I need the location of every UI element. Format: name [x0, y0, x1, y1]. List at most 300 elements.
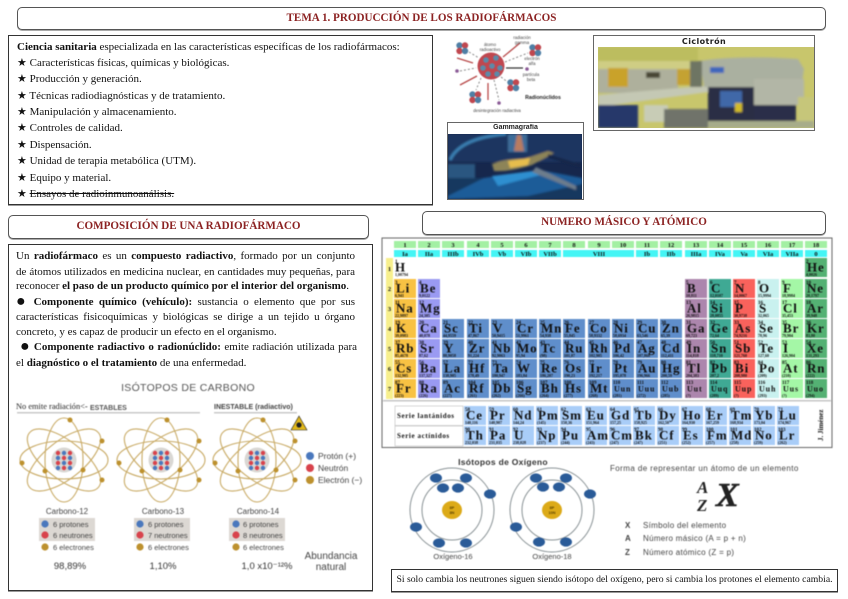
element cells: (223)	[395, 393, 404, 398]
lanthanide and actinide series: U	[514, 428, 524, 442]
element cells: 38	[419, 341, 424, 346]
chart: isótopos de carbono: natural	[316, 562, 346, 573]
subgroup labels: Ia	[402, 251, 409, 258]
image: radionuclide diagram: gamma	[515, 40, 530, 45]
list item: ★ Técnicas radiodiagnósticas y de tratamiento.	[17, 90, 225, 102]
lanthanide and actinide series: (247)	[610, 440, 619, 445]
element cells: I	[783, 340, 789, 356]
element cells: 204,383	[686, 373, 699, 378]
group numbers: 7	[548, 242, 552, 249]
lanthanide and actinide series: Yb	[755, 408, 773, 422]
diagram: notación atómica: Forma de representar un átomo de un elemento	[610, 464, 799, 473]
element cells: 121,760	[734, 353, 747, 358]
element cells: 40	[468, 341, 474, 346]
element cells: 118	[806, 381, 814, 386]
element cells: 18,9984	[782, 293, 795, 298]
list item: ★ Dispensación.	[17, 138, 92, 150]
element cells: 80	[661, 361, 666, 366]
element cells: 186,207	[540, 373, 553, 378]
period numbers	[386, 258, 393, 399]
subgroup labels: Vb	[498, 251, 507, 258]
element cells: 108	[564, 381, 572, 386]
lanthanide and actinide series: 62	[561, 408, 566, 413]
element cells: 9,0122	[419, 293, 430, 298]
lanthanide and actinide series: Eu	[587, 408, 605, 422]
lanthanide and actinide series: 65	[634, 408, 640, 413]
callout: nota final: Si solo cambia los neutrones siguen siendo isótopo del oxígeno, pero si cambia los protones el elemento cambia.	[396, 574, 833, 585]
diagram: notación atómica: Símbolo del elemento	[643, 521, 727, 530]
list item: ★ Equipo y material.	[17, 172, 111, 184]
element cells: 87,62	[419, 353, 428, 358]
image: radionuclide diagram: alfa	[529, 61, 536, 66]
element cells: 19	[395, 321, 400, 326]
period numbers: 6	[388, 366, 392, 373]
element cells: 50,9415	[492, 333, 505, 338]
element cells: 22	[468, 321, 474, 326]
chart: isótopos de carbono: Carbono-13	[142, 507, 185, 516]
element cells: 83	[734, 361, 740, 366]
element cells: C	[711, 280, 721, 296]
lanthanide and actinide series: Cm	[611, 428, 633, 442]
element cells: 78,96	[758, 333, 767, 338]
element cells: Fe	[565, 320, 581, 336]
element cells: (277)	[564, 393, 573, 398]
element cells: 126,904	[782, 353, 795, 358]
element cells: 39,0983	[395, 333, 408, 338]
element cells: Mt	[590, 380, 608, 396]
element cells: Mn	[541, 320, 562, 336]
lanthanide and actinide series: Tb	[635, 408, 653, 422]
element cells: Nb	[493, 340, 511, 356]
lanthanide and actinide series: Md	[731, 428, 752, 442]
lanthanide and actinide series: 99	[682, 428, 688, 433]
lanthanide and actinide series: (244)	[561, 440, 570, 445]
period numbers: 2	[388, 286, 391, 293]
diagram: notación atómica: Z	[625, 548, 630, 557]
image: radionuclide diagram: electrón	[524, 56, 540, 61]
diagram: notación atómica: A	[625, 534, 631, 543]
element cells: 65,39	[661, 333, 670, 338]
element cells: 54,938	[540, 333, 551, 338]
element cells: 45	[589, 341, 594, 346]
element cells: 117	[782, 381, 790, 386]
lanthanide and actinide series: 100	[706, 428, 714, 433]
element cells: 37	[395, 341, 400, 346]
element cells: Rf	[469, 380, 485, 396]
element cells: Uut	[687, 384, 703, 394]
lanthanide and actinide series: (258)	[730, 440, 739, 445]
lanthanide and actinide series: 151,964	[586, 420, 599, 425]
lanthanide and actinide series: Lu	[779, 408, 797, 422]
diagram: isótopos de oxígeno: 10N	[549, 511, 556, 515]
element cells: 39	[443, 341, 448, 346]
element cells: Pd	[614, 340, 631, 356]
element cells: 54	[806, 341, 812, 346]
element cells: 180,947	[492, 373, 505, 378]
element cells: 114	[710, 381, 718, 386]
line: de átomos utilizados en medicina nuclear, en cantidades muy pequeñas, para	[16, 266, 355, 278]
element cells: Hf	[469, 360, 485, 376]
chart: isótopos de carbono: Electrón (−)	[318, 475, 362, 485]
element cells: 85	[782, 361, 788, 366]
element cells: 27	[589, 321, 594, 326]
element cells: 44,9559	[443, 333, 456, 338]
element cells: Uuu	[638, 384, 655, 394]
chart: isótopos de carbono: No emite radiación<-	[16, 402, 88, 411]
chart: isótopos de carbono: Neutrón	[318, 463, 349, 473]
list item: ★ Manipulación y almacenamiento.	[17, 106, 177, 118]
lanthanide and actinide series: Ho	[683, 408, 701, 422]
element cells: 63,546	[637, 333, 648, 338]
element cells: 10,811	[686, 293, 697, 298]
element cells: (210)	[782, 373, 791, 378]
element cells: 6	[710, 281, 713, 286]
chart: isótopos de carbono: INESTABLE (radiactivo)	[214, 404, 293, 411]
lanthanide and actinide series: Sm	[562, 408, 582, 422]
element cells: W	[517, 360, 531, 376]
lanthanide and actinide series: 98	[658, 428, 664, 433]
element cells: 17	[782, 301, 788, 306]
lanthanide and actinide series: Ce	[466, 408, 483, 422]
element cells: La	[444, 360, 461, 376]
group numbers	[394, 241, 827, 249]
element cells: Ar	[807, 300, 824, 316]
line: el diagnóstico o el tratamiento de una enfermedad.	[16, 357, 246, 369]
line: reconocer el paso de un producto químico por el interior del organismo.	[16, 280, 349, 292]
element cells: Te	[759, 340, 774, 356]
group numbers: 16	[765, 242, 772, 249]
element cells: (222)	[806, 373, 815, 378]
element cells: 55,845	[564, 333, 575, 338]
lanthanide and actinide series: Pu	[562, 428, 579, 442]
lanthanide and actinide series: 70	[754, 408, 760, 413]
lanthanide and actinide series: 167,259	[706, 420, 719, 425]
element cells: 14,0067	[734, 293, 747, 298]
lanthanide and actinide series	[395, 406, 799, 446]
diagram: notación atómica: A	[696, 478, 708, 497]
lanthanide and actinide series: Tm	[731, 408, 752, 422]
element cells: 50	[710, 341, 716, 346]
element cells: Cl	[783, 300, 798, 316]
element cells: 49	[686, 341, 692, 346]
element cells: 15	[734, 301, 740, 306]
lanthanide and actinide series: Es	[683, 428, 699, 442]
element cells: O	[759, 280, 770, 296]
element cells: 138,905	[443, 373, 456, 378]
element cells: 106,42	[613, 353, 624, 358]
element cells: 85,4678	[395, 353, 408, 358]
element cells: 110	[613, 381, 621, 386]
image: radionuclide diagram: desintegración radiactiva	[473, 108, 521, 113]
panel: ciencia sanitaria	[8, 35, 433, 205]
element cells: Tc	[541, 340, 556, 356]
element cells: Ca	[420, 320, 438, 336]
element cells: 52	[758, 341, 764, 346]
group numbers: 9	[597, 242, 601, 249]
element cells: (266)	[516, 393, 525, 398]
diagram: notación atómica: Número atómico (Z = p)	[643, 548, 734, 557]
element cells: Uup	[735, 384, 752, 394]
element cells: 195,078	[613, 373, 626, 378]
lanthanide and actinide series: 162,50	[658, 420, 669, 425]
chart: isótopos de carbono: 6 electrones	[243, 543, 284, 552]
element cells: Zr	[469, 340, 485, 356]
element cells: 34	[758, 321, 764, 326]
element cells: 20,1797	[806, 293, 819, 298]
group numbers: 18	[813, 242, 820, 249]
element cells: 196,966	[637, 373, 650, 378]
element cells: Ru	[565, 340, 583, 356]
element cells: 112	[661, 381, 669, 386]
heading: composición: COMPOSICIÓN DE UNA RADIOFÁRMACO	[76, 220, 301, 232]
element cells: 53	[782, 341, 788, 346]
element cells: 9	[782, 281, 785, 286]
period numbers: 5	[388, 346, 392, 353]
chart: isótopos de carbono: 6 protones	[148, 520, 184, 529]
lanthanide and actinide series: 101	[730, 428, 738, 433]
lanthanide and actinide series: (251)	[658, 440, 667, 445]
element cells: Hs	[565, 380, 582, 396]
lanthanide and actinide series: 140,907	[489, 420, 502, 425]
image: radionuclide diagram: partícula	[523, 72, 540, 77]
image: radionuclide diagram: radioactivo	[480, 47, 501, 52]
element cells: 20	[419, 321, 424, 326]
element cells: Rh	[590, 340, 608, 356]
subgroup labels: VIIb	[543, 251, 557, 258]
element cells: 30	[661, 321, 666, 326]
element cells: 46	[613, 341, 618, 346]
element cells: 89	[443, 381, 448, 386]
list item: ★ Características físicas, químicas y biológicas.	[17, 56, 229, 68]
element cells: Mg	[420, 300, 441, 316]
element cells: (294)	[806, 393, 815, 398]
element cells: 84	[758, 361, 764, 366]
lanthanide and actinide series: 96	[610, 428, 616, 433]
element cells: Sc	[444, 320, 459, 336]
element cells	[394, 258, 827, 398]
element cells: Uun	[614, 384, 631, 394]
element cells: 75	[540, 361, 546, 366]
subgroup labels: IIb	[667, 251, 676, 258]
lanthanide and actinide series: Am	[587, 428, 609, 442]
element cells: Uuo	[807, 384, 824, 394]
chart: isótopos de carbono: 6 electrones	[53, 543, 94, 552]
intro text: Ciencia sanitaria especializada en las características específicas de los radiofármacos:	[17, 40, 400, 52]
element cells: 104	[468, 381, 476, 386]
element cells: Y	[444, 340, 454, 356]
element cells: Se	[759, 320, 774, 336]
subgroup labels: IVb	[473, 251, 484, 258]
element cells: 76	[564, 361, 570, 366]
lanthanide and actinide series: Th	[466, 428, 484, 442]
element cells: 118,710	[710, 353, 723, 358]
subgroup labels: IVa	[715, 251, 726, 258]
element cells: 4,0026	[806, 272, 817, 277]
element cells: 127,60	[758, 353, 769, 358]
element cells: (209)	[758, 373, 767, 378]
image caption: Gammagrafía	[493, 124, 538, 131]
element cells: 47	[637, 341, 642, 346]
element cells: Sr	[420, 340, 435, 356]
element cells: Zn	[662, 320, 680, 336]
group numbers: 14	[717, 242, 724, 249]
lanthanide and actinide series: 66	[658, 408, 664, 413]
element cells: Br	[783, 320, 799, 336]
element cells: 106	[516, 381, 524, 386]
subgroup labels: VIa	[763, 251, 774, 258]
lanthanide and actinide series: 61	[537, 408, 542, 413]
element cells: 14	[710, 301, 716, 306]
subgroup labels: Va	[740, 251, 748, 258]
element cells: 114,818	[686, 353, 699, 358]
element cells: 24,305	[419, 313, 430, 318]
lanthanide and actinide series: 144,24	[513, 420, 524, 425]
element cells: 30,9738	[734, 313, 747, 318]
chart: isótopos de carbono: 6 electrones	[148, 543, 189, 552]
lanthanide and actinide series: Cf	[659, 428, 675, 442]
element cells: 1,00794	[395, 272, 408, 277]
image: radionuclide diagram: átomo	[484, 42, 497, 47]
element cells: S	[759, 300, 767, 316]
element cells: Uub	[662, 384, 679, 394]
period numbers: 1	[388, 266, 391, 273]
lanthanide and actinide series: (252)	[682, 440, 691, 445]
element cells: Sn	[711, 340, 727, 356]
element cells: 29	[637, 321, 642, 326]
element cells: Pt	[614, 360, 628, 376]
element cells: Uus	[783, 384, 799, 394]
element cells: (268)	[589, 393, 598, 398]
lanthanide and actinide series: 231,035	[489, 440, 502, 445]
group numbers: 8	[572, 242, 576, 249]
element cells: 73	[492, 361, 498, 366]
diagram: isótopos de oxígeno: 8N	[450, 511, 455, 515]
element cells: 2	[806, 260, 809, 265]
element cells: Bi	[735, 360, 749, 376]
element cells: 82	[710, 361, 716, 366]
element cells: 56	[419, 361, 424, 366]
element cells: He	[807, 260, 825, 274]
element cells: 115	[734, 381, 742, 386]
element cells: 13	[686, 301, 692, 306]
element cells: Co	[590, 320, 608, 336]
diagram: notación atómica: Z	[696, 496, 707, 515]
lanthanide and actinide series: 59	[489, 408, 494, 413]
element cells: (285)	[661, 393, 670, 398]
chart: isótopos de carbono: 6 neutrones	[53, 531, 93, 540]
image: radionuclide diagram: beta	[527, 77, 536, 82]
element cells: Ne	[807, 280, 824, 296]
element cells: 41	[492, 341, 498, 346]
element cells: 81	[686, 361, 692, 366]
heading: número másico y atómico	[422, 211, 826, 235]
vertical credit: J. Jiménez	[817, 410, 825, 441]
chart: isótopos de carbono: ISÓTOPOS DE CARBONO	[121, 381, 255, 394]
element cells: 58,6934	[613, 333, 626, 338]
lanthanide and actinide series: 58	[465, 408, 470, 413]
element cells: K	[396, 320, 407, 336]
gammagraphy photo	[448, 134, 582, 199]
element cells: 36	[806, 321, 812, 326]
lanthanide and actinide series: 68	[706, 408, 712, 413]
element cells: (?)	[686, 393, 691, 398]
element cells: (?)	[782, 393, 787, 398]
cyclotron photo	[598, 47, 814, 128]
element cells: Fr	[396, 380, 412, 396]
element cells: (?)	[734, 393, 739, 398]
element cells: 200,59	[661, 373, 672, 378]
lanthanide and actinide series: 91	[489, 428, 494, 433]
lanthanide and actinide series: 60	[513, 408, 518, 413]
element cells: Ti	[469, 320, 483, 336]
element cells: 208,980	[734, 373, 747, 378]
element cells: At	[783, 360, 799, 376]
diagram: isótopos de oxígeno: 8P	[550, 506, 555, 510]
subgroup labels: VIIa	[785, 251, 799, 258]
element cells: 105	[492, 381, 500, 386]
lanthanide and actinide series: (247)	[634, 440, 643, 445]
element cells: Kr	[807, 320, 825, 336]
element cells: 26	[564, 321, 570, 326]
group numbers: 4	[476, 242, 480, 249]
lanthanide and actinide series: Serie lantánidos	[397, 412, 455, 420]
element cells: H	[395, 260, 406, 274]
period numbers: 4	[388, 326, 392, 333]
element cells: V	[493, 320, 503, 336]
period numbers: 3	[388, 306, 392, 313]
element cells: Uuq	[711, 384, 728, 394]
element cells: (264)	[540, 393, 549, 398]
chart: isótopos de carbono: Carbono-12	[46, 507, 89, 516]
diagram: isótopos de oxígeno: Oxígeno-16	[433, 552, 473, 561]
element cells: 79	[637, 361, 642, 366]
lanthanide and actinide series: 71	[778, 408, 784, 413]
lanthanide and actinide series: 69	[730, 408, 736, 413]
element cells: In	[687, 340, 701, 356]
group numbers: 3	[451, 242, 455, 249]
list item struck through: ★ Ensayos de radioinmunoanálisis.	[17, 188, 174, 200]
chart: isótopos de carbono: 6 protones	[53, 520, 89, 529]
group numbers: 11	[644, 242, 650, 249]
group numbers: 10	[620, 242, 626, 249]
element cells: Cd	[662, 340, 680, 356]
lanthanide and actinide series: 64	[610, 408, 616, 413]
element cells: (227)	[443, 393, 452, 398]
element cells: F	[783, 280, 792, 296]
element cells: 207,2	[710, 373, 719, 378]
element cells: 112,411	[661, 353, 674, 358]
lanthanide and actinide series: 140,116	[465, 420, 478, 425]
element cells: Pb	[711, 360, 728, 376]
lanthanide and actinide series: Bk	[635, 428, 653, 442]
lanthanide and actinide series: Nd	[514, 408, 532, 422]
element cells: 26,9815	[686, 313, 699, 318]
element cells: Bh	[541, 380, 559, 396]
element cells: 131,293	[806, 353, 819, 358]
element cells: 8	[758, 281, 761, 286]
element cells: 48	[661, 341, 666, 346]
chart: isótopos de carbono: Carbono-14	[237, 507, 280, 516]
element cells: 47,867	[468, 333, 479, 338]
element cells: Os	[565, 360, 582, 376]
element cells: 32	[710, 321, 716, 326]
callout: nota final	[391, 569, 838, 592]
lanthanide and actinide series: (262)	[778, 440, 787, 445]
element cells: 78	[613, 361, 618, 366]
heading: número másico y atómico: NUMERO MÁSICO Y ATÓMICO	[541, 216, 707, 228]
lanthanide and actinide series: 67	[682, 408, 688, 413]
element cells: 87	[395, 381, 400, 386]
